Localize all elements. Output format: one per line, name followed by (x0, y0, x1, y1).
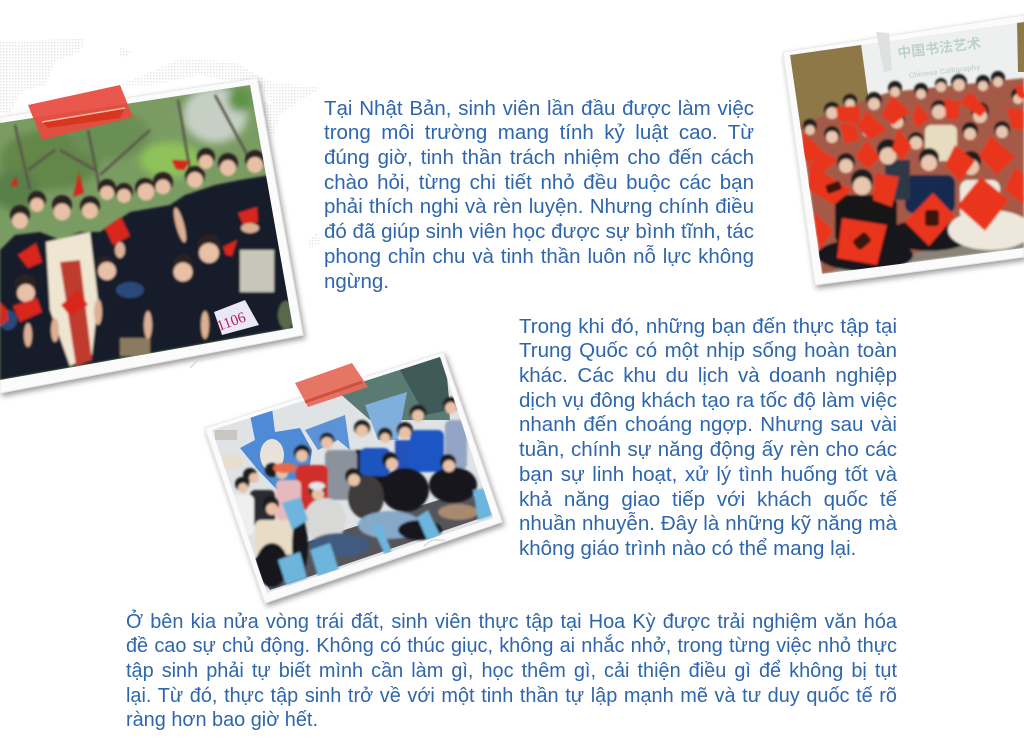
red tape (28, 85, 133, 140)
photo: students in Japan (0, 78, 303, 393)
text block: China: dịch vụ đông khách tạo ra tốc độ làm việc (519, 389, 897, 412)
dark clothing mass (0, 175, 293, 380)
text block: China: khác. Các khu du lịch và doanh nghiệp (519, 364, 897, 387)
text block: Japan: phong chỉn chu và tinh thần luôn nỗ lực không (324, 245, 754, 268)
hat (273, 463, 297, 473)
text block: United States: đề cao sự chủ động. Không có thúc giục, không ai nhắc nhở, trong từng việc nhỏ thực (126, 635, 897, 657)
text block: United States: ràng hơn bao giờ hết. (126, 709, 318, 731)
photo scene: Chinese Calligraphy (908, 62, 982, 80)
text block: China: nhuần nhuyễn. Đây là những kỹ năng mà (519, 512, 897, 535)
text block: China: nhanh đến choáng ngợp. Nhưng sau vài (519, 413, 897, 436)
crowd (800, 78, 1024, 274)
arms (24, 207, 259, 347)
text block: Japan: trong môi trường mang tính kỷ luật cao. Từ (324, 121, 754, 144)
photo frame (205, 352, 502, 603)
photo scene (0, 80, 300, 385)
photo frame (783, 15, 1024, 285)
text block: Japan: đó đã giúp sinh viên học được sự bình tĩnh, tác (324, 220, 754, 243)
text block: Japan: Tại Nhật Bản, sinh viên lần đầu được làm việc (324, 97, 754, 120)
text block: United States (126, 610, 897, 731)
text block: China: Trung Quốc có một nhịp sống hoàn toàn (519, 339, 897, 362)
text block: United States: Ở bên kia nửa vòng trái đất, sinh viên thực tập tại Hoa Kỳ được trải nghiệm văn hóa (126, 611, 897, 633)
text block: Japan: ngừng. (324, 270, 389, 293)
text block: China: khả năng giao tiếp với khách quốc tế (519, 488, 897, 511)
race bib (214, 300, 259, 335)
paper fold (424, 540, 445, 546)
photo scene (212, 357, 493, 593)
blue building shapes (240, 408, 312, 495)
text block: China (519, 315, 898, 560)
paper fold (876, 32, 892, 72)
flags (0, 160, 258, 326)
text block: Japan: phải thích nghi và rèn luyện. Nhưng chính điều (324, 195, 754, 218)
photo: calligraphy class in China (780, 15, 1024, 285)
text block: China: không giáo trình nào có thể mang lại. (519, 537, 856, 560)
world map dotted background (0, 38, 322, 248)
text block: United States: tập sinh phải tự biết mình cần làm gì, học thêm gì, cải thiện điều gì để không bị tụt (126, 660, 897, 682)
text block: Japan (324, 97, 754, 293)
red tape (295, 363, 368, 407)
ground (250, 490, 490, 590)
banner text: 中国书法艺术 (896, 35, 982, 61)
photo frame (0, 78, 303, 393)
paper fold (190, 350, 250, 368)
text block: Japan: chào hỏi, từng chi tiết nhỏ đều buộc các bạn (324, 171, 754, 194)
photo scene: 1106 (215, 309, 249, 335)
red calligraphy sheets (802, 85, 1024, 265)
photo: students in tourism group (205, 350, 505, 605)
photo scene (780, 20, 1024, 280)
brush strokes (825, 181, 939, 251)
text block: China: Trong khi đó, những bạn đến thực tập tại (519, 315, 897, 338)
text block: China: tuần, chính sự năng động ấy rèn cho các (519, 438, 897, 461)
hair and faces (10, 148, 265, 296)
dress (46, 232, 98, 366)
text block: United States: lại. Từ đó, thực tập sinh trở về với một tinh thần tự lập mạnh mẽ và tư duy quốc tế rõ (126, 685, 897, 707)
group (354, 448, 389, 486)
text block: China: bạn sự linh hoạt, xử lý tình huống tốt và (519, 463, 897, 486)
text block: Japan: đúng giờ, tinh thần trách nhiệm cho đến cách (324, 146, 754, 169)
blue gift bags (278, 488, 493, 585)
